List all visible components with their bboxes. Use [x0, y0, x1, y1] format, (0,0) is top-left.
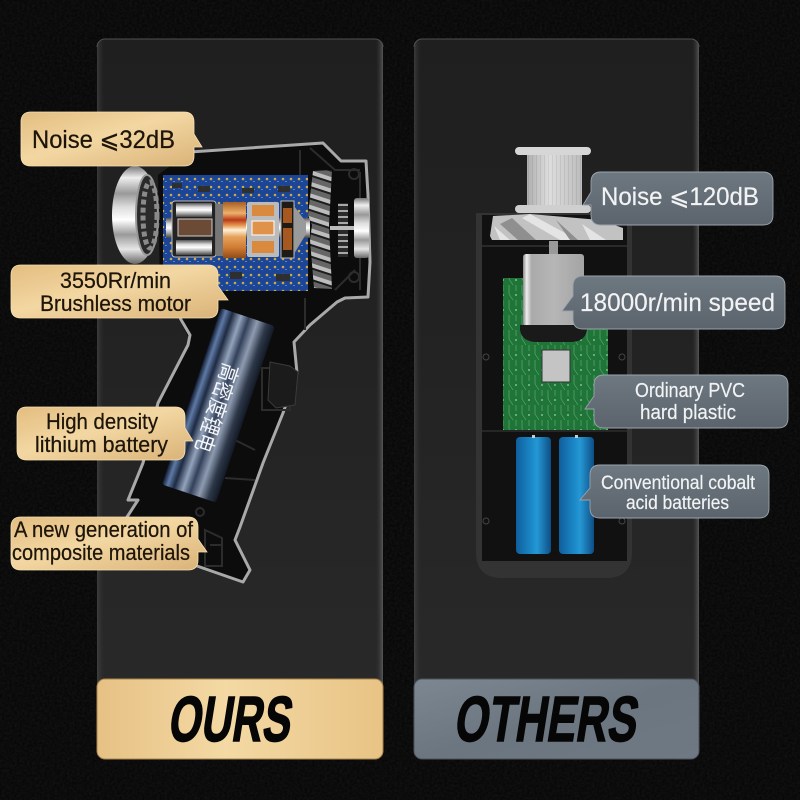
battery cells [516, 435, 594, 554]
callout: cobalt batteries [580, 465, 769, 518]
circuit board [503, 278, 608, 430]
trigger block [268, 362, 298, 408]
callout: 18000 speed [562, 276, 785, 329]
label: ours [97, 679, 383, 759]
callout: PVC plastic: hard plastic [640, 402, 736, 424]
label: others: OTHERS [451, 683, 644, 755]
panel: ours [97, 39, 383, 699]
callout: brushless motor: Brushless motor [40, 291, 191, 316]
callout: brushless motor: 3550Rr/min [60, 268, 171, 293]
callout: composite materials: A new generation of [14, 517, 194, 542]
fan impeller [308, 170, 332, 289]
callout: lithium battery [17, 407, 193, 460]
circuit board [163, 175, 308, 291]
front bearing [112, 166, 158, 264]
callout: PVC plastic [585, 375, 788, 428]
product: conventional device cutaway [476, 147, 632, 578]
motor [520, 241, 587, 382]
callout: noise 32dB [21, 112, 202, 166]
internal ribs [196, 148, 360, 566]
gun shell outline [127, 143, 370, 582]
callout: lithium battery: High density [46, 409, 159, 434]
callout: lithium battery: lithium battery [35, 432, 169, 457]
product: brushless gun cutaway [112, 142, 370, 582]
callout: cobalt batteries: acid batteries [626, 493, 729, 514]
panel: others [414, 39, 699, 699]
callout: noise 120dB: Noise ⩽120dB [601, 183, 759, 211]
callout: composite materials [11, 517, 207, 570]
callout: noise 120dB [583, 172, 773, 225]
lithium battery [162, 308, 275, 503]
callout: noise 32dB: Noise ⩽32dB [32, 126, 175, 154]
callout: PVC plastic: Ordinary PVC [635, 380, 745, 402]
label: ours: OURS [165, 683, 298, 755]
battery lettering: 高密度锂电 [190, 360, 243, 455]
case [476, 213, 632, 578]
callout: cobalt batteries: Conventional cobalt [601, 473, 756, 494]
callout: 18000 speed: 18000r/min speed [580, 289, 775, 317]
callout: brushless motor [11, 265, 228, 318]
callout: composite materials: composite materials [12, 540, 190, 565]
pulley [515, 147, 591, 213]
motor rotor [166, 201, 310, 258]
fan blades [490, 214, 623, 240]
gun body fill [127, 142, 370, 582]
nozzle gear [330, 198, 369, 258]
